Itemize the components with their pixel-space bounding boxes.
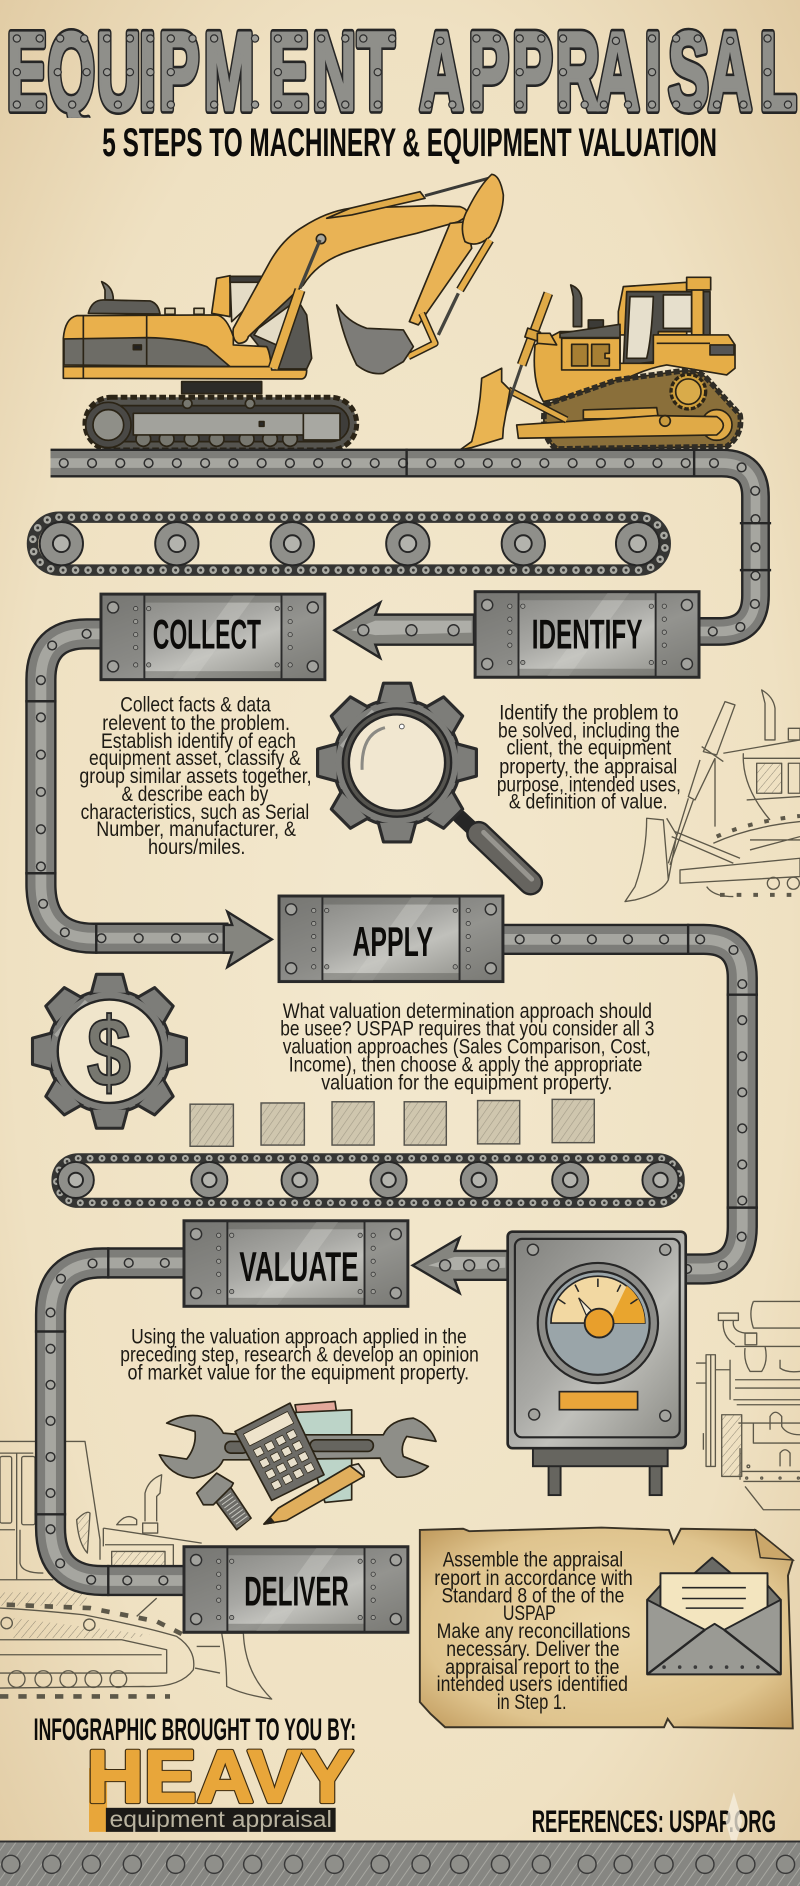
step box: valuate: [184, 1221, 408, 1306]
step box: identify: IDENTIFY: [532, 610, 642, 657]
identify description: Identify the problem to: [499, 699, 678, 724]
deliver description: appraisal report to the: [445, 1654, 620, 1679]
conveyor chain 2: [57, 1158, 680, 1203]
calculator: [235, 1403, 324, 1500]
valuate description: [120, 1324, 479, 1385]
apply description: What valuation determination approach should: [283, 998, 652, 1023]
deliver description: [434, 1547, 633, 1714]
bulldozer push arm: [505, 293, 723, 438]
deliver description: report in accordance with: [434, 1565, 633, 1590]
icon: gear with dollar sign: $: [87, 997, 131, 1107]
identify description: [497, 699, 681, 813]
deliver description: Assemble the appraisal: [443, 1547, 623, 1572]
logo: heavy equipment appraisal: HEAVY: [87, 1734, 354, 1818]
collect description: characteristics, such as Serial: [81, 799, 309, 824]
apply description: Income), then choose & apply the appropriate: [289, 1052, 642, 1077]
step box: deliver: [184, 1547, 408, 1632]
identify description: purpose, intended uses,: [497, 771, 681, 796]
deliver description: USPAP: [503, 1600, 556, 1625]
pipe: top to identify: [51, 449, 771, 631]
gauge stand: [533, 1445, 668, 1495]
magnifier handle: [460, 817, 532, 883]
step box: collect: COLLECT: [153, 610, 261, 657]
deliver description: intended users identified: [437, 1671, 628, 1696]
arrow head: into apply: [224, 912, 272, 967]
logo: heavy equipment appraisal: equipment appraisal: [109, 1806, 332, 1832]
bulldozer: [460, 277, 741, 450]
valuate description: Using the valuation approach applied in the: [131, 1324, 467, 1349]
step box: apply: APPLY: [352, 918, 433, 965]
panel: parchment deliver note: [420, 1528, 793, 1728]
collect description: Collect facts & data: [120, 691, 271, 716]
apply description: valuation for the equipment property.: [321, 1070, 612, 1095]
excavator bucket: [337, 305, 413, 374]
apply description: be usee? USPAP requires that you consider all 3: [280, 1016, 654, 1041]
deliver description: Make any reconcillations: [437, 1618, 631, 1643]
excavator body: [63, 282, 307, 379]
bolt: [197, 1473, 251, 1530]
icon: wrench, calculator, pencil and bolt: [159, 1401, 436, 1530]
wrench: [159, 1415, 436, 1478]
step box: collect: [101, 594, 325, 680]
bulldozer track: [544, 371, 741, 449]
icon: envelope: [647, 1558, 781, 1674]
collect description: [79, 691, 312, 859]
identify description: & definition of value.: [509, 788, 668, 813]
paperwork: [295, 1401, 352, 1502]
arrow: identify to collect: [334, 603, 474, 658]
apply description: [280, 998, 654, 1095]
bulldozer cab: [571, 277, 711, 365]
excavator boom: [233, 178, 488, 368]
collect description: hours/miles.: [148, 834, 245, 859]
pipe: valuate to deliver: [35, 1247, 184, 1596]
bulldozer body: [534, 324, 735, 402]
identify description: property, the appraisal: [499, 753, 677, 778]
icon: gear with magnifying glass: [318, 683, 532, 883]
excavator cab: [165, 276, 312, 369]
sketch: bulldozer outline bottom left: [0, 1441, 272, 1699]
identify description: client, the equipment: [506, 735, 671, 760]
sparkle watermark: [725, 1792, 742, 1850]
deliver description: Standard 8 of the of the: [442, 1583, 624, 1607]
collect description: Number, manufacturer, &: [96, 816, 296, 841]
deliver description: in Step 1.: [497, 1689, 567, 1714]
apply description: valuation approaches (Sales Comparison, Cost,: [283, 1034, 651, 1059]
collect description: & describe each by: [122, 781, 268, 806]
valuate description: of market value for the equipment property.: [128, 1360, 469, 1385]
collect description: Establish identify of each: [101, 728, 296, 753]
pipe: apply to gauge: [503, 924, 758, 1269]
asset squares on conveyor: [190, 1099, 594, 1146]
pencil: [264, 1464, 364, 1524]
arrow: gauge to valuate: [413, 1238, 508, 1293]
identify description: be solved, including the: [498, 717, 680, 742]
gauge dial: [538, 1263, 658, 1383]
valuate description: preceding step, research & develop an opinion: [120, 1342, 479, 1367]
excavator track: [85, 382, 357, 450]
collect description: group similar assets together,: [79, 763, 312, 788]
gauge machine: [508, 1232, 686, 1495]
bulldozer blade: [460, 368, 510, 450]
collect description: equipment asset, classify &: [89, 745, 301, 770]
deliver description: necessary. Deliver the: [446, 1636, 620, 1661]
riveted bottom band: [0, 1841, 800, 1886]
sketch: bulldozer outline right: [625, 690, 800, 902]
title: EQUIPMENT APPRAISAL: [7, 9, 797, 133]
step box: deliver: DELIVER: [244, 1568, 349, 1615]
sketch: engine outline right: [696, 1301, 800, 1510]
step box: identify: [475, 592, 699, 677]
excavator stick: [408, 174, 503, 357]
step box: apply: [279, 896, 503, 981]
icon: gear with dollar sign: [32, 974, 186, 1128]
excavator: [63, 174, 503, 450]
conveyor chain 1: [32, 517, 665, 570]
credit heading: INFOGRAPHIC BROUGHT TO YOU BY:: [34, 1712, 356, 1747]
pipe: collect to apply: [25, 634, 229, 954]
collect description: relevent to the problem.: [102, 710, 290, 735]
step box: valuate: VALUATE: [239, 1243, 358, 1290]
